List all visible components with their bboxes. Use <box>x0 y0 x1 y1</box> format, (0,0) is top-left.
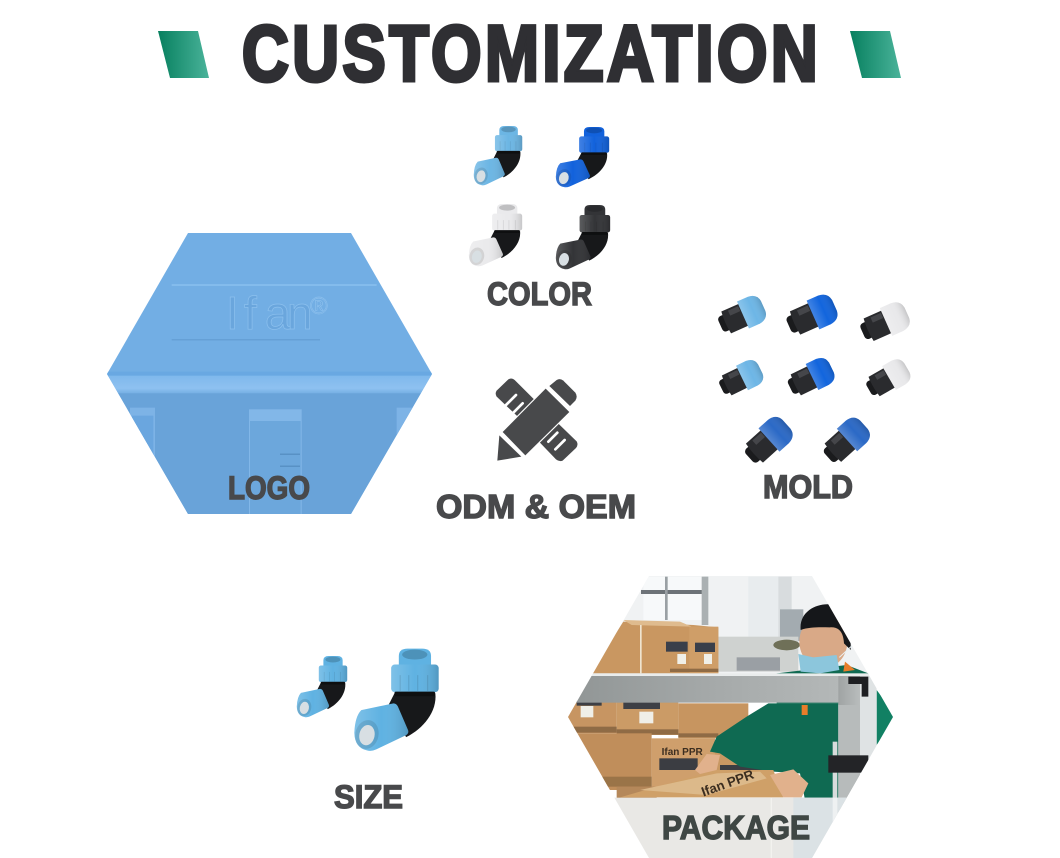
panel: logo <box>100 225 440 522</box>
panel: odm and oem <box>436 378 636 525</box>
panel: color <box>468 126 610 312</box>
small elbow <box>296 656 347 717</box>
size label: SIZE <box>334 779 403 815</box>
held carton <box>620 770 784 798</box>
color label: COLOR <box>487 276 592 312</box>
factory background <box>620 576 868 674</box>
logo label: LOGO <box>228 470 310 506</box>
embossed logo photo <box>100 225 440 522</box>
left title accent <box>158 31 209 78</box>
odm and oem label: ODM & OEM <box>436 488 636 525</box>
warehouse photo <box>560 570 900 858</box>
panel: size <box>296 649 439 815</box>
panel: mold <box>714 291 914 505</box>
lower cartons <box>560 701 768 800</box>
title: CUSTOMIZATION <box>242 11 818 98</box>
coupler row 2 <box>715 355 914 402</box>
mold label: MOLD <box>763 469 853 505</box>
shelf frame <box>576 673 877 811</box>
light blue elbow <box>473 126 522 185</box>
worker <box>710 604 897 800</box>
upper cartons <box>590 620 718 673</box>
label overlay strip <box>614 798 846 858</box>
package label: PACKAGE <box>662 809 810 846</box>
lower cartons: Ifan PPR <box>662 747 703 758</box>
worker hands <box>695 754 808 797</box>
embossed Ifan mark: ® <box>310 293 328 320</box>
large elbow <box>353 649 439 751</box>
right title accent <box>850 31 901 78</box>
coupler row 1 <box>714 291 913 346</box>
royal blue elbow <box>555 127 609 187</box>
panel: package <box>560 570 900 858</box>
black elbow <box>555 205 610 269</box>
embossed Ifan mark: Ifan <box>226 287 313 339</box>
coupler row 3 <box>739 413 874 469</box>
held carton: Ifan PPR <box>699 767 756 799</box>
white elbow <box>468 204 522 266</box>
icon: pencil and ruler <box>496 378 578 461</box>
infographic canvas <box>107 24 910 858</box>
title banner <box>158 11 901 98</box>
